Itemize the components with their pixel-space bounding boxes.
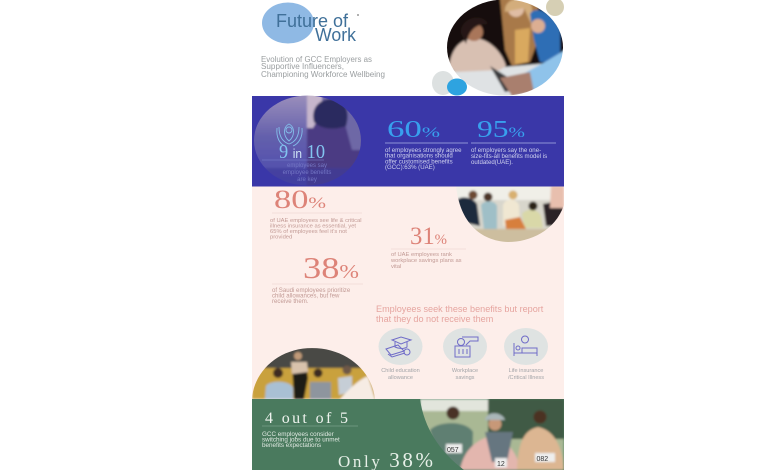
stat: 60%: 60 %: [387, 117, 440, 143]
label: child education allowance: allowance: [388, 375, 413, 381]
stat: 4 out of 5: benefits expectations: [262, 442, 321, 449]
stat: 60%: of employees strongly agree: [385, 147, 462, 154]
stat: 80%: [270, 185, 362, 240]
decorative blob: tan: [546, 0, 564, 16]
stat: 38%: child allowances, but few: [272, 293, 340, 300]
label: child education allowance: Child education: [381, 368, 420, 374]
decorative blob: blue: [447, 78, 467, 96]
photo: group on yellow sofa: [252, 347, 376, 399]
stat: 60%: (GCC):63% (UAE): [385, 164, 435, 171]
logo: Future of Work: Work: [315, 25, 357, 45]
photo: three women with tablet: [445, 0, 565, 100]
label: life insurance: Life insurance: [509, 368, 543, 374]
stat: 60%: [385, 117, 468, 171]
subtitle: Evolution of GCC Employers as: [261, 55, 372, 64]
photo circle: person in hood: [254, 96, 361, 186]
stat: 80%: 65% of employees feel it’s not: [270, 229, 347, 235]
stat: 9 in 10: employees say: [287, 163, 327, 169]
stat: 4 out of 5: 4 out of 5: [265, 410, 348, 427]
label: workplace savings: savings: [456, 375, 475, 381]
stat: 38%: [272, 250, 363, 305]
stat: 38%: 38 %: [303, 250, 359, 285]
stat: 95%: 95 %: [477, 117, 525, 143]
icon: lotus in hands: [277, 124, 302, 146]
stat: 31%: 31%: [410, 223, 447, 250]
stat: 4 out of 5: [262, 410, 358, 449]
photo: team around a table: [456, 186, 564, 244]
panel: blue statistics: [250, 94, 564, 190]
label: workplace savings: Workplace: [452, 368, 478, 374]
stat: 4 out of 5: GCC employees consider: [262, 431, 334, 438]
stat: 80%: illness insurance as essential, yet: [270, 224, 356, 230]
panel: green section: [252, 399, 564, 470]
photo: runners with race numbers: 12: [497, 461, 505, 468]
stat: 9 in 10: employee benefits: [283, 170, 331, 176]
stat: 38%: receive them.: [272, 298, 309, 305]
subtitle: [261, 55, 385, 79]
stat: 4 out of 5: switching jobs due to unmet: [262, 436, 340, 444]
photo: runners with race numbers: 057: [447, 447, 459, 454]
stat: 80%: 80 %: [274, 185, 326, 214]
logo: Future of Work: Future of: [276, 11, 349, 31]
logo: Future of Work: [262, 2, 359, 45]
heading: employees seek these benefits: that they do not receive them: [376, 314, 493, 324]
icon: child education allowance: [378, 328, 422, 365]
photo: runners with race numbers: [420, 399, 564, 470]
stat: 60%: offer customised benefits: [385, 158, 453, 165]
stat: 80%: provided: [270, 234, 292, 240]
stat: 9 in 10: are key: [297, 177, 317, 183]
icon: workplace savings: [443, 328, 487, 365]
subtitle: Championing Workforce Wellbeing: [261, 70, 385, 79]
icon: life insurance bed: [504, 328, 548, 365]
stat: 31%: [390, 223, 466, 270]
stat: 31%: vital: [391, 264, 401, 270]
decorative blob: grey: [432, 71, 454, 95]
panel: pink statistics: [252, 185, 564, 399]
stat: 9 in 10: [262, 141, 331, 183]
stat: 95%: size-fits-all benefits model is: [471, 153, 547, 160]
stat: 95%: [471, 117, 556, 166]
panel: header: [261, 2, 385, 79]
photo: runners with race numbers: 082: [536, 456, 548, 463]
subtitle: Supportive Influencers,: [261, 62, 344, 71]
stat: 80%: of UAE employees see life & critical: [270, 218, 362, 224]
stat: 38%: of Saudi employees prioritize: [272, 287, 350, 294]
stat: 95%: of employers say the one-: [471, 147, 541, 154]
stat: 60%: that organisations should: [385, 153, 453, 160]
stat: 95%: outdated(UAE).: [471, 159, 513, 166]
label: life insurance: /Critical Illness: [508, 375, 544, 381]
heading: employees seek these benefits: Employees seek these benefits but report: [376, 304, 543, 314]
stat: 31%: workplace savings plans as: [390, 258, 462, 264]
stat: 9 in 10: 9 in 10: [279, 141, 325, 163]
stat: 31%: of UAE employees rank: [391, 252, 452, 258]
